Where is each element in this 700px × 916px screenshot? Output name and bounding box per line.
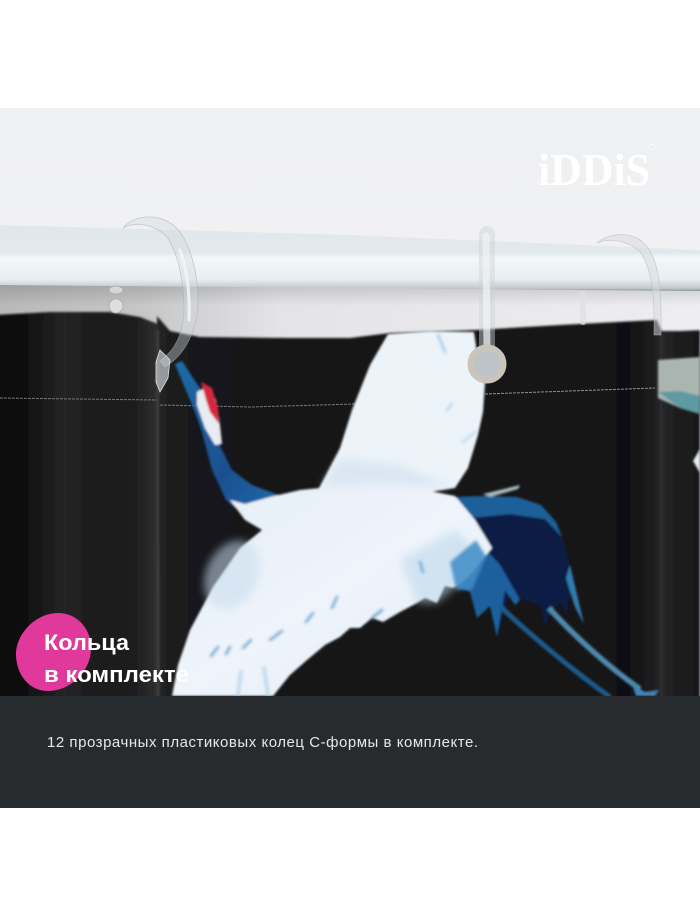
brand logo: iDDiS: iDDiS: [538, 144, 650, 195]
shadowed area under the rod: [0, 285, 700, 338]
transparent ring left: [109, 217, 198, 392]
stitch line: [0, 388, 655, 407]
crane tail: [445, 485, 659, 697]
right curtain fragment of print: [658, 357, 700, 473]
panel: dark caption band: [0, 696, 700, 808]
transparent ring right: [583, 235, 661, 335]
wall background: [0, 108, 700, 250]
heading: в комплекте: [44, 662, 189, 687]
curtain fabric: [0, 312, 700, 700]
caption text: 12 прозрачных пластиковых колец С-формы в комплекте.: [47, 734, 478, 751]
crane body and lower wing: [172, 485, 492, 696]
crane feather shading: [193, 335, 486, 695]
crane neck and head: [175, 361, 284, 508]
pink accent blob: [16, 613, 91, 691]
heading: [46, 634, 188, 682]
curtain rod: [0, 225, 700, 291]
eyelet and transparent ring center: [471, 234, 503, 380]
crane raised wing: [318, 331, 485, 492]
photo: curtain on rod: [0, 108, 700, 700]
heading: Кольца: [44, 630, 130, 655]
crane illustration: [172, 331, 659, 697]
tail streamers: [500, 606, 610, 697]
